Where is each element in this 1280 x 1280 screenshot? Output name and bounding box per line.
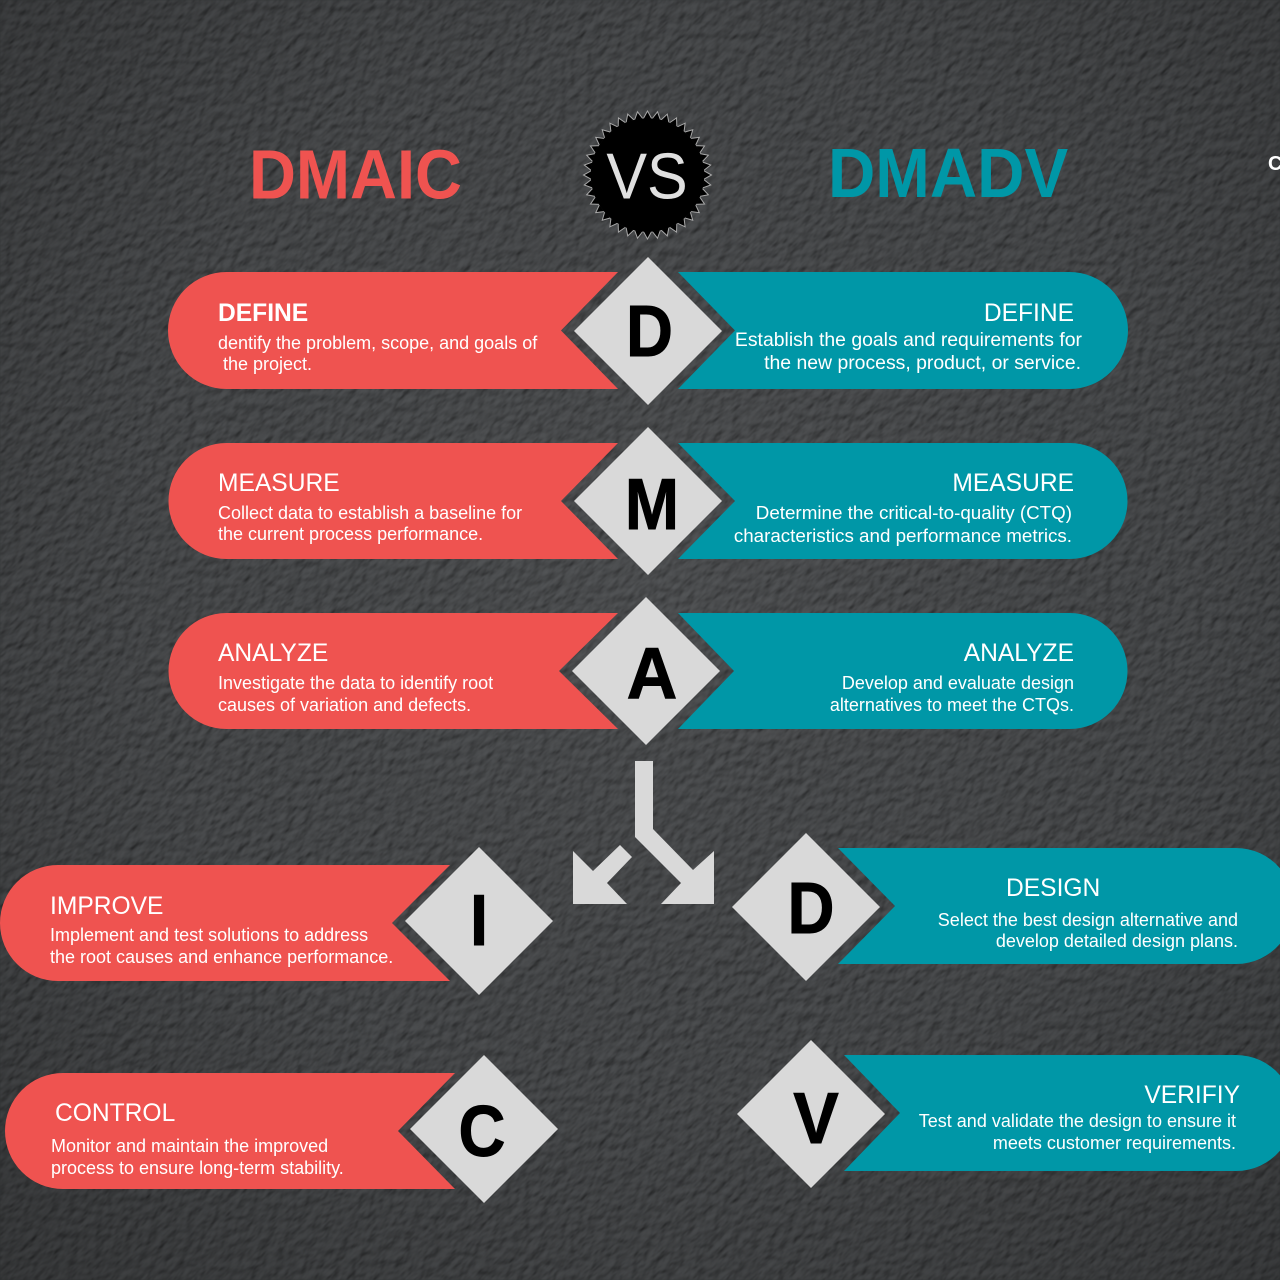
panel: DMADV measure: [678, 443, 1128, 559]
icon: diamond D: [574, 257, 722, 405]
panel: DMAIC measure: MEASURE: [218, 470, 340, 497]
panel: DMADV analyze: alternatives to meet the CTQs.: [830, 695, 1074, 715]
icon: diamond A: A: [627, 634, 677, 714]
panel: DMADV design: Select the best design alternative and: [938, 910, 1238, 930]
panel: DMADV design: DESIGN: [1006, 875, 1100, 902]
panel: DMAIC define: the project.: [223, 354, 312, 374]
panel: DMAIC analyze: Investigate the data to identify root: [218, 673, 493, 693]
panel: DMADV analyze: ANALYZE: [964, 640, 1074, 667]
panel: DMAIC measure: the current process performance.: [218, 524, 483, 544]
icon: diamond I: [405, 847, 553, 995]
panel: DMAIC control: Monitor and maintain the improved: [51, 1136, 328, 1156]
panel: DMADV measure: characteristics and performance metrics.: [734, 525, 1072, 546]
icon: diamond V: [737, 1040, 885, 1188]
panel: DMADV define: [678, 272, 1128, 389]
panel: DMADV measure: MEASURE: [952, 470, 1074, 497]
panel: DMAIC analyze: ANALYZE: [218, 640, 328, 667]
icon: diamond C: [410, 1055, 558, 1203]
icon: diamond D design: [732, 833, 880, 981]
panel: DMAIC analyze: [168, 613, 618, 729]
icon: diamond I: I: [470, 880, 488, 961]
panel: DMADV analyze: [678, 613, 1128, 729]
panel: DMADV measure: Determine the critical-to-quality (CTQ): [756, 502, 1072, 523]
panel: DMADV define: Establish the goals and requirements for: [735, 329, 1083, 351]
panel: DMADV define: the new process, product, or service.: [764, 352, 1081, 374]
title: DMAIC: DMAIC: [249, 137, 462, 214]
badge: VS starburst: VS: [606, 141, 688, 213]
panel: DMAIC improve: Implement and test solutions to address: [50, 925, 368, 945]
panel: DMADV verify: meets customer requirements.: [993, 1133, 1236, 1153]
arrow: splitting into two paths: [573, 761, 714, 904]
panel: DMADV verify: Test and validate the design to ensure it: [919, 1111, 1236, 1131]
panel: DMAIC analyze: causes of variation and defects.: [218, 695, 471, 715]
panel: DMADV design: [838, 848, 1280, 964]
icon: diamond A: [572, 597, 720, 745]
icon: diamond V: V: [793, 1077, 839, 1158]
panel: DMAIC control: CONTROL: [55, 1100, 175, 1127]
panel: DMAIC improve: IMPROVE: [50, 893, 163, 920]
icon: diamond D design: D: [788, 868, 834, 949]
panel: DMADV analyze: Develop and evaluate design: [842, 673, 1074, 693]
panel: DMAIC define: DEFINE: [218, 300, 308, 327]
panel: DMADV verify: VERIFIY: [1144, 1082, 1240, 1109]
panel: DMAIC measure: Collect data to establish a baseline for: [218, 503, 522, 523]
icon: diamond D: D: [626, 291, 673, 372]
panel: DMAIC improve: the root causes and enhance performance.: [50, 947, 393, 967]
title: DMADV: DMADV: [828, 135, 1068, 212]
icon: diamond M: [574, 427, 722, 575]
panel: DMADV design: develop detailed design plans.: [996, 931, 1238, 951]
panel: DMAIC measure: [168, 443, 618, 559]
badge: VS starburst: [584, 111, 712, 239]
panel: DMADV define: DEFINE: [984, 300, 1074, 327]
panel: DMADV verify: [844, 1055, 1280, 1171]
panel: DMAIC define: dentify the problem, scope, and goals of: [218, 333, 538, 353]
panel: DMAIC control: process to ensure long-term stability.: [51, 1158, 344, 1178]
icon: diamond C: C: [459, 1091, 505, 1172]
panel: DMAIC control: [5, 1073, 455, 1189]
panel: DMAIC define: [168, 272, 618, 389]
icon: diamond M: M: [625, 464, 679, 545]
panel: DMAIC improve: [0, 865, 450, 981]
